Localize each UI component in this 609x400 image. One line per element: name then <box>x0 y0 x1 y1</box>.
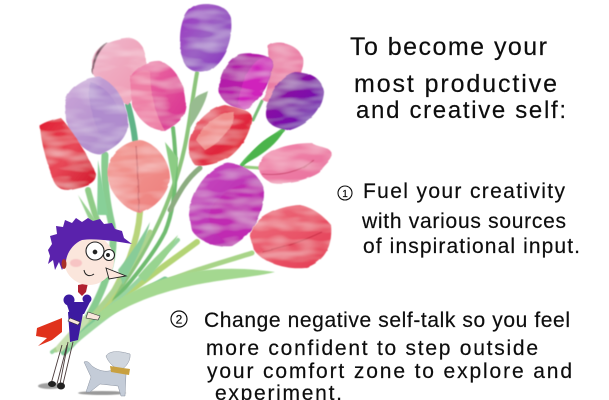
tulip: red left <box>40 118 96 190</box>
shoes and shadow <box>38 381 65 390</box>
nose <box>106 268 126 279</box>
dog body <box>84 361 126 396</box>
small grey dog <box>78 352 130 396</box>
dog shadow <box>78 391 126 395</box>
tulip: lilac <box>65 77 128 154</box>
bouquet illustration <box>40 4 332 352</box>
point 1 text <box>338 180 580 258</box>
tulip: magenta <box>219 53 273 110</box>
legs <box>51 342 73 384</box>
heading: and creative self: <box>356 97 566 124</box>
hair <box>48 218 132 270</box>
earring <box>62 259 66 269</box>
cheek <box>70 259 82 267</box>
tulip: pale pink <box>92 38 146 105</box>
bone collar <box>110 366 130 375</box>
point 1 text: of inspirational input. <box>363 235 580 258</box>
bow <box>78 283 88 296</box>
heading <box>350 33 566 124</box>
number 1 badge: 1 <box>342 189 348 200</box>
stems and leaves <box>52 73 283 352</box>
number 2 badge <box>171 311 187 327</box>
tulip: coral red centre <box>189 105 252 166</box>
point 1 text: Fuel your creativity <box>363 180 566 203</box>
dress <box>64 294 92 342</box>
point 2 text: more confident to step outside <box>206 337 538 360</box>
point 2 text <box>171 309 572 400</box>
point 1 text: with various sources <box>361 210 566 233</box>
tulip: deep purple <box>266 72 324 130</box>
character: woman with glasses <box>36 218 132 390</box>
tulip: rose pink right <box>259 143 332 183</box>
tulip: coral right <box>250 205 331 268</box>
number 1 badge <box>338 186 352 200</box>
face <box>64 235 114 285</box>
hands <box>68 312 100 325</box>
tulip: top purple <box>180 4 231 72</box>
dog head <box>106 352 130 370</box>
tulip: big magenta <box>189 163 264 246</box>
heading: most productive <box>354 70 557 98</box>
skirt <box>36 318 62 346</box>
number 2 badge: 2 <box>176 312 183 326</box>
smile <box>84 270 94 276</box>
tulip: pink behind <box>262 42 303 103</box>
point 2 text: Change negative self-talk so you feel <box>204 309 570 332</box>
leaves <box>78 91 284 322</box>
glasses <box>86 242 114 260</box>
tulip: salmon <box>108 140 170 213</box>
tulip: pink front <box>130 61 186 131</box>
point 2 text: your comfort zone to explore and <box>207 360 572 383</box>
heading: To become your <box>350 33 547 61</box>
